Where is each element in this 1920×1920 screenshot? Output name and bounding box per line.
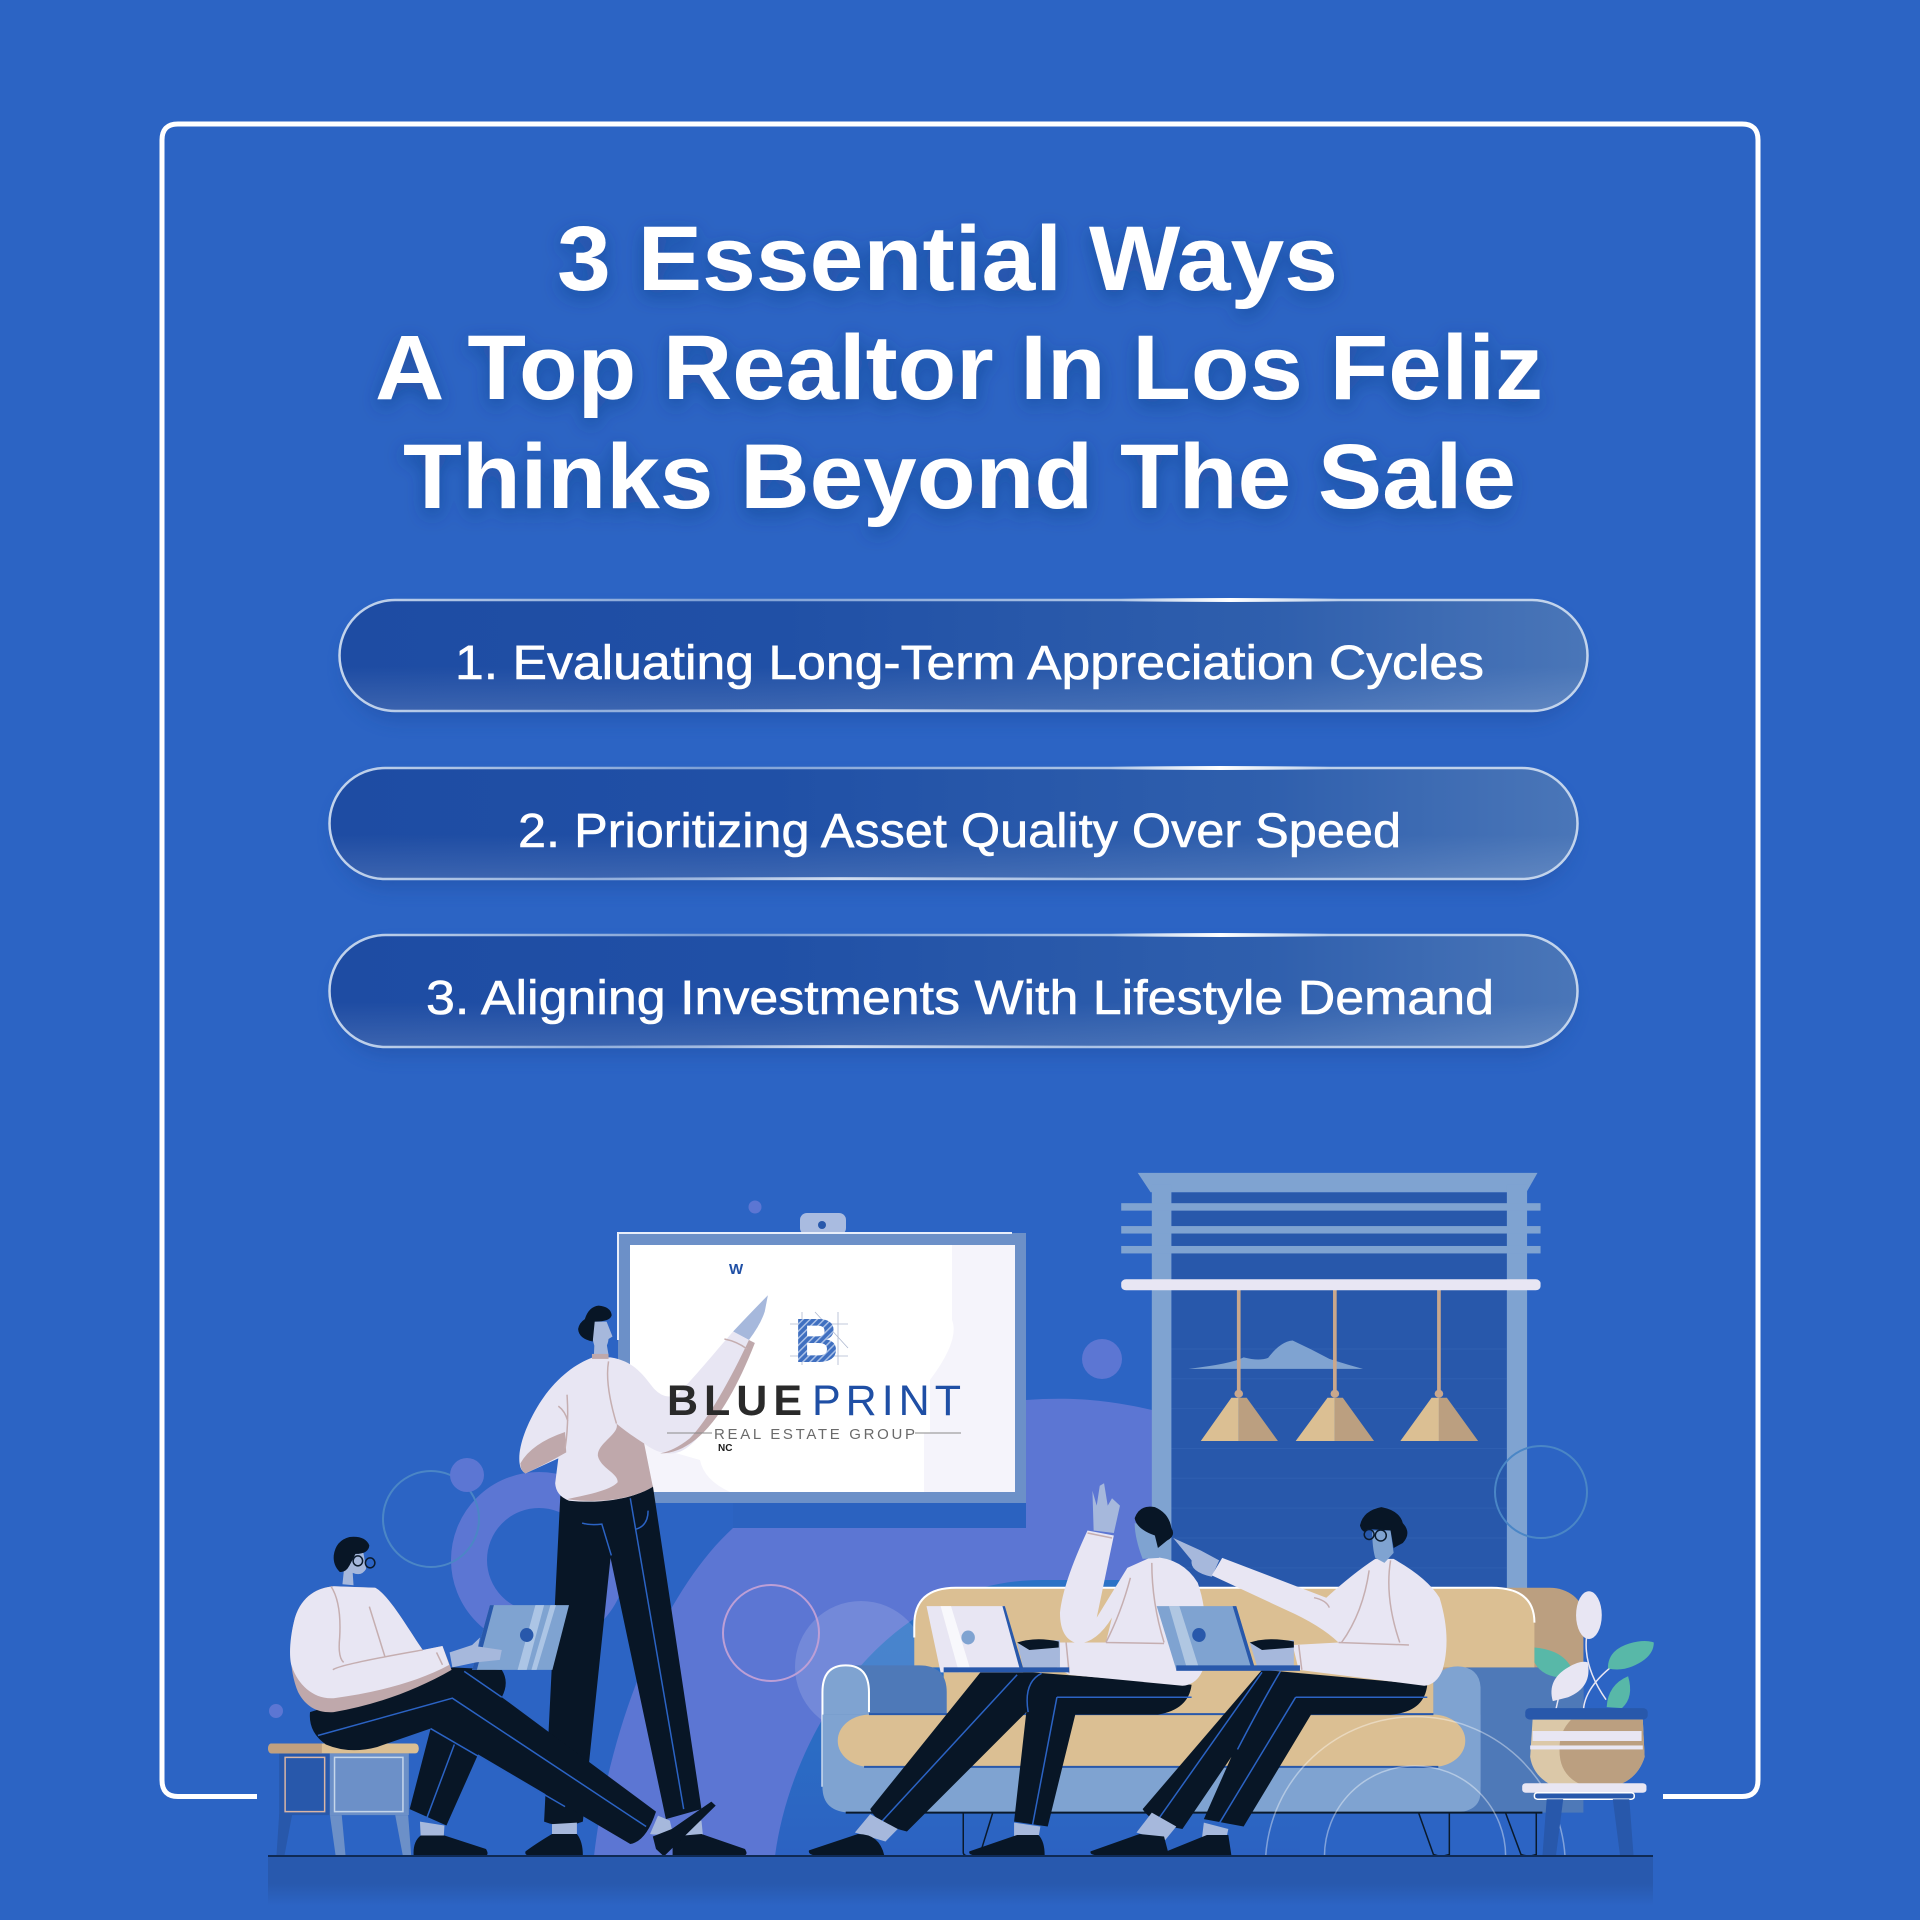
stool bbox=[268, 1743, 419, 1856]
laptop: right person bbox=[1157, 1606, 1300, 1671]
potted plant on stand bbox=[1522, 1591, 1654, 1856]
logo wordmark: REAL ESTATE GROUP bbox=[714, 1426, 915, 1443]
logo wordmark: PRINT bbox=[812, 1377, 961, 1425]
logo icon: blueprint B: B bbox=[794, 1307, 839, 1376]
pill 3 bbox=[330, 933, 1578, 1055]
lamp 1 bbox=[1201, 1390, 1278, 1441]
illustration backdrop shapes bbox=[269, 1200, 1300, 1856]
projector screen bbox=[618, 1213, 1026, 1528]
window with blinds and pendant lamps bbox=[1121, 1173, 1541, 1590]
white frame with gap at bottom bbox=[162, 124, 1758, 1796]
logo wordmark: W bbox=[729, 1261, 744, 1278]
pill 1: 1. Evaluating Long-Term Appreciation Cycles bbox=[455, 637, 1484, 690]
logo wordmark: NC bbox=[718, 1443, 732, 1454]
title bbox=[375, 208, 1543, 528]
presenter standing and pointing at screen bbox=[519, 1295, 768, 1855]
pill 1 bbox=[340, 598, 1588, 720]
lamp 2 bbox=[1296, 1390, 1374, 1441]
sofa bbox=[822, 1588, 1583, 1856]
title: Thinks Beyond The Sale bbox=[403, 426, 1516, 528]
title: A Top Realtor In Los Feliz bbox=[375, 317, 1543, 419]
laptop: middle person bbox=[927, 1606, 1069, 1672]
seated person: right pointing bbox=[1090, 1507, 1447, 1855]
title: 3 Essential Ways bbox=[557, 208, 1338, 310]
pill 2: 2. Prioritizing Asset Quality Over Speed bbox=[518, 805, 1401, 858]
thin circle over window bbox=[1495, 1446, 1587, 1538]
logo wordmark: BLUE bbox=[667, 1377, 802, 1425]
pill 3: 3. Aligning Investments With Lifestyle Demand bbox=[426, 972, 1494, 1025]
logo wordmark bbox=[667, 1261, 961, 1454]
floor band bbox=[268, 1855, 1653, 1906]
seated person with tablet on stool bbox=[290, 1537, 716, 1856]
seated person: middle with raised hand bbox=[809, 1483, 1206, 1855]
pill 2 bbox=[330, 766, 1578, 888]
lamp 3 bbox=[1400, 1390, 1478, 1441]
